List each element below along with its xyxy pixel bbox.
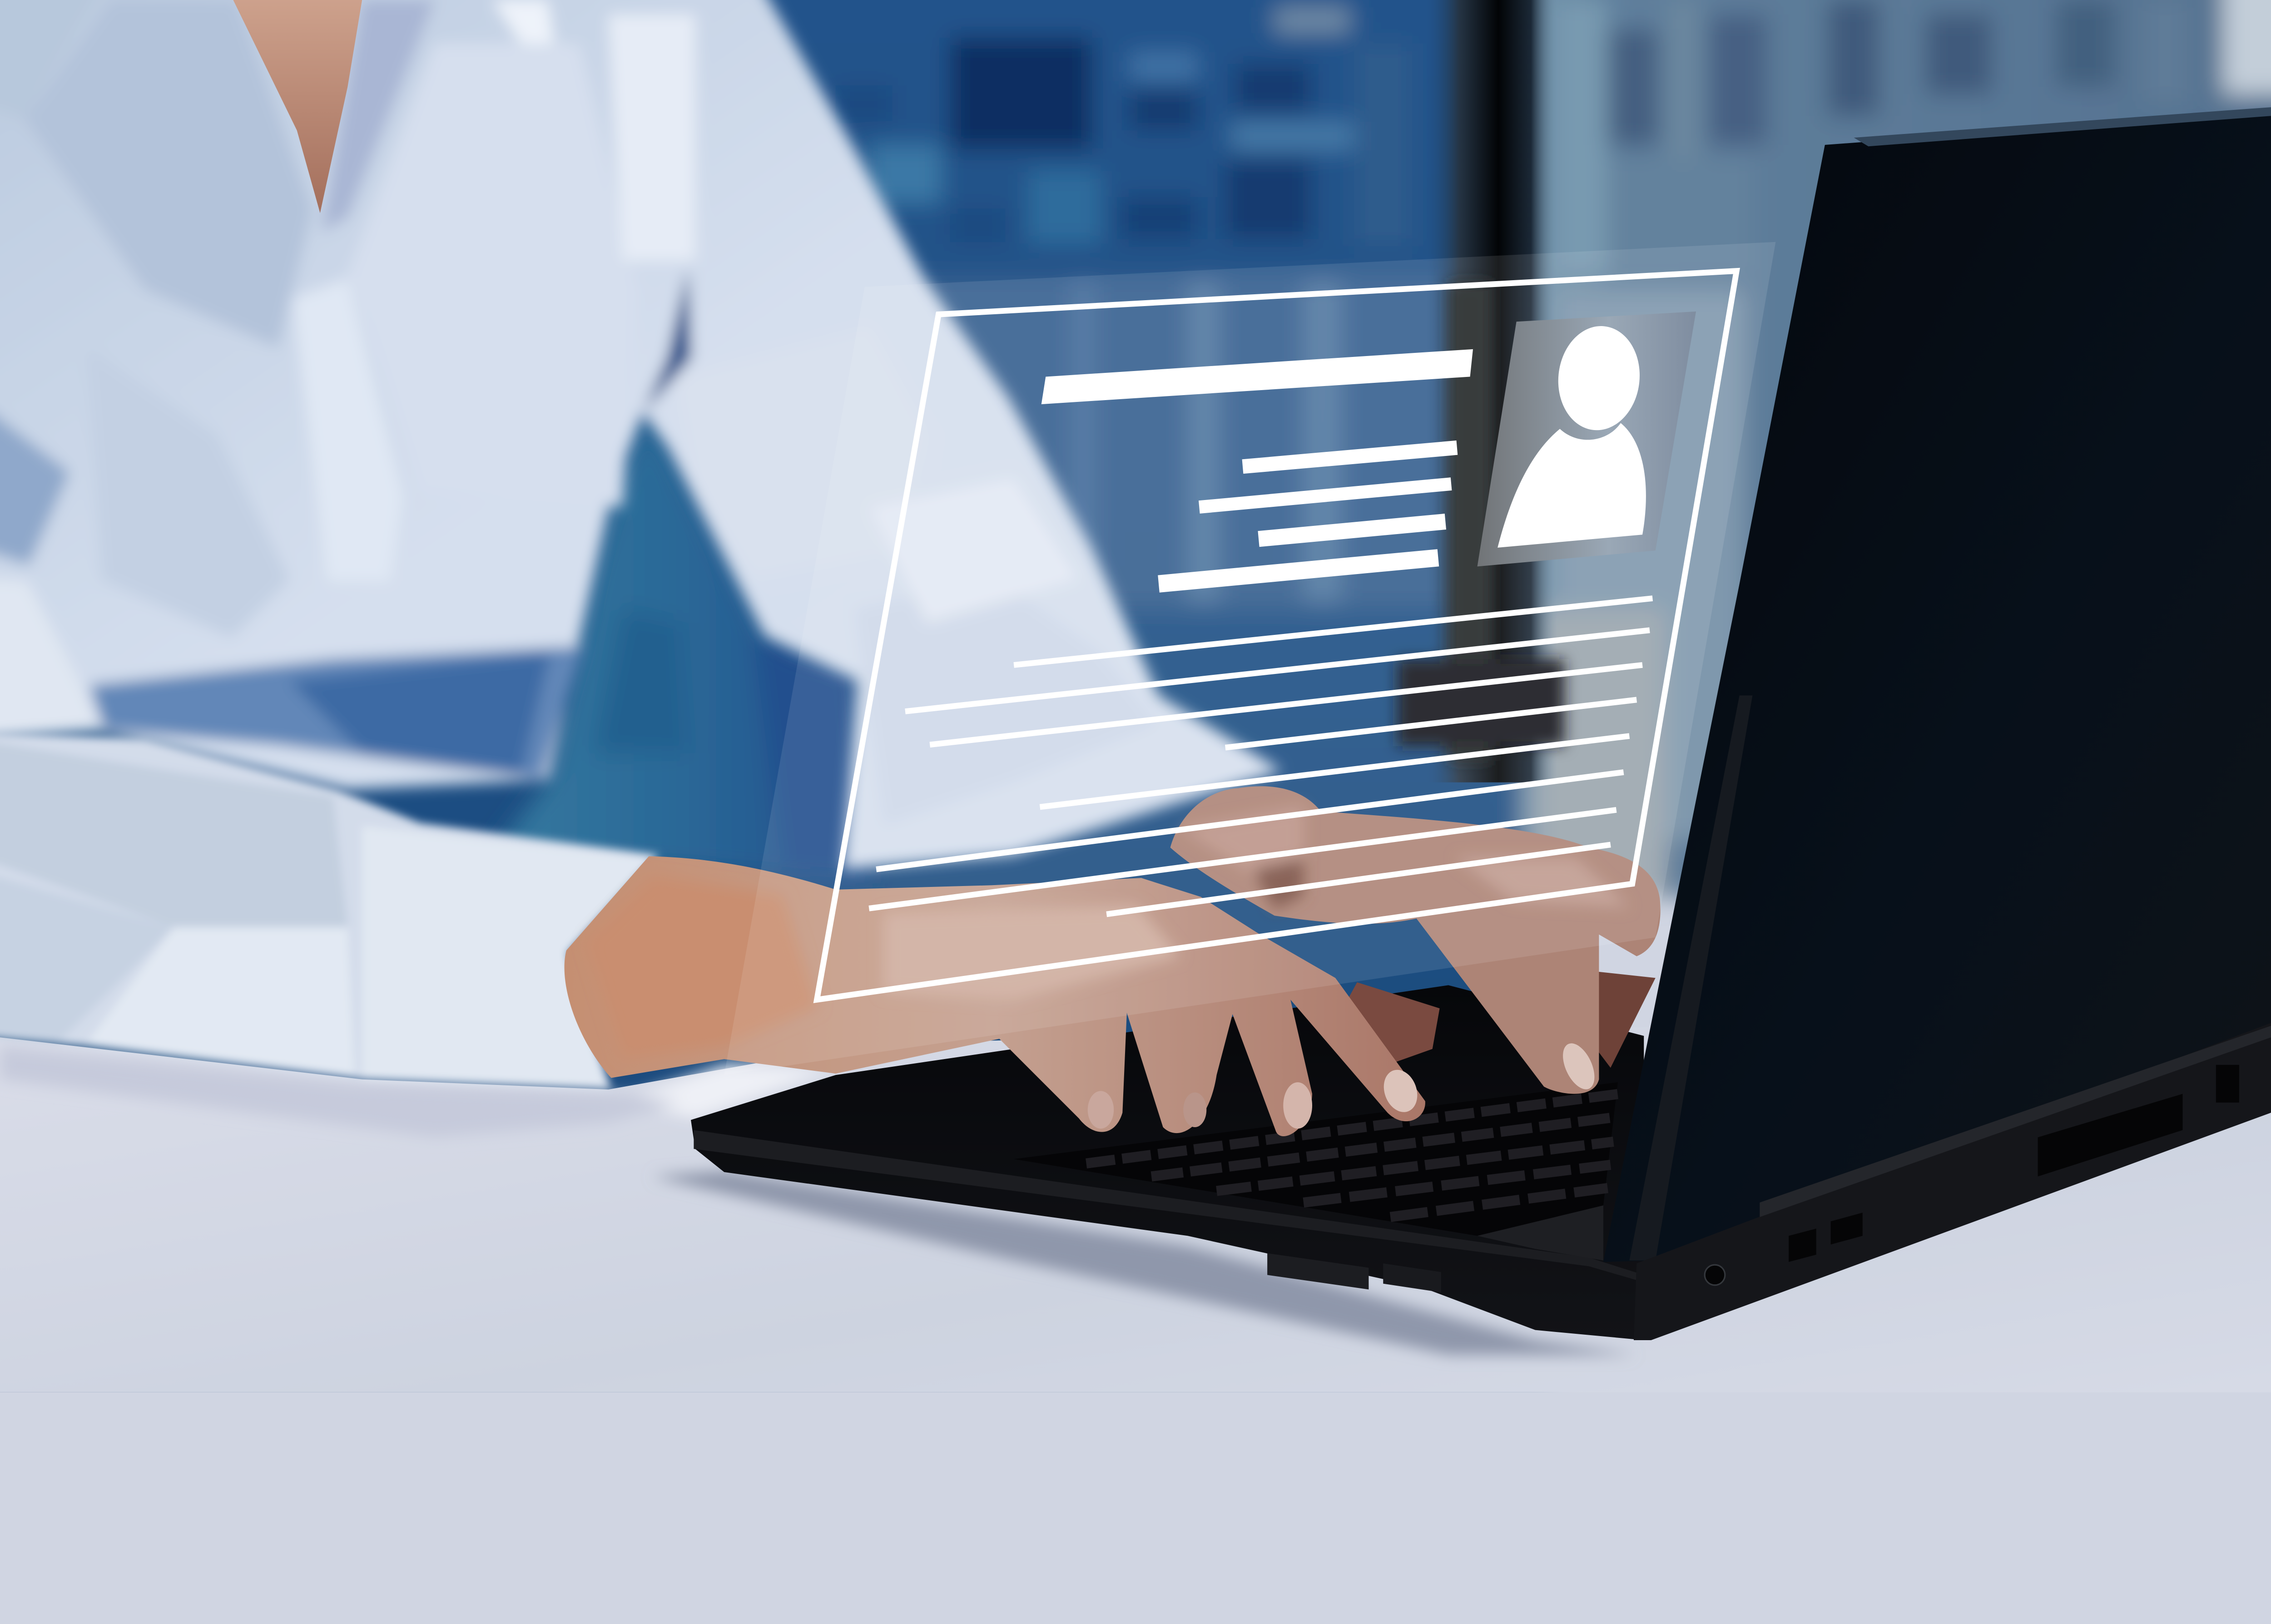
title bar [1041,349,1473,404]
placket [293,278,402,581]
left hand on keyboard [565,856,1440,1136]
table shadows [0,1046,1636,1355]
right hand on keyboard [1170,786,1661,1094]
dark column [1427,0,1557,782]
lower blue shadow [90,646,584,779]
collar panel [25,0,313,348]
card frame [817,271,1736,1000]
dark reflections behind card [1398,282,1564,761]
shirt sleeve and cuff [0,732,659,1089]
neck skin [233,0,362,213]
vent [2038,1094,2182,1176]
keyboard keys [1086,1094,1619,1217]
translucent hologram plane [724,242,1775,1075]
hologram card [817,271,1736,1000]
torso shadow gap [492,413,869,884]
laptop side with ports [1634,1023,2271,1340]
laptop base [691,985,1644,1340]
arm lights [674,326,927,579]
hand shading [586,806,1629,1058]
body text lines [869,599,1652,914]
photo box [1478,312,1696,566]
subtitle bars [1159,448,1457,584]
table surface [0,1014,2271,1392]
laptop screen lid [1603,107,2271,1262]
armpit [643,268,691,413]
white shirt torso and arm [0,0,1282,869]
icon: person [1497,322,1646,548]
